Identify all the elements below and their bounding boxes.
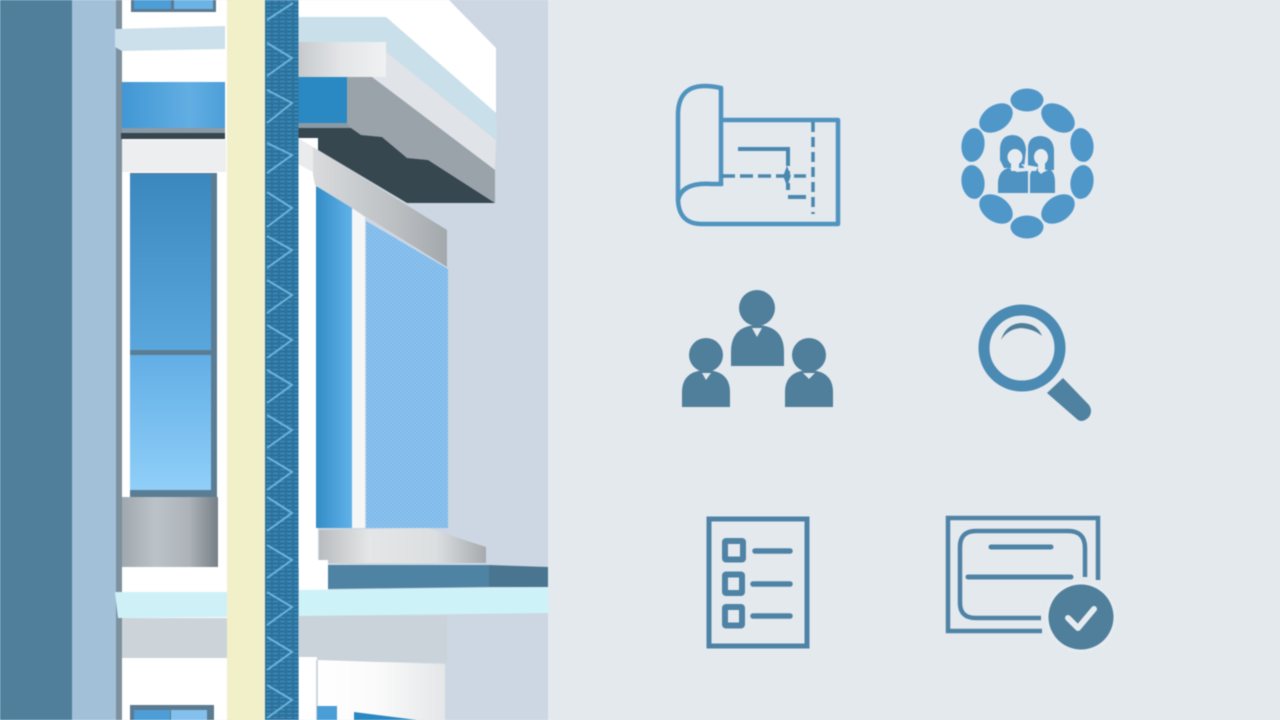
dark corner wall [0,0,72,720]
upper balcony [297,0,497,203]
right person [785,338,833,407]
sky behind building [296,0,548,720]
bay window [298,138,448,568]
ring of ovals [959,88,1096,238]
icon: checklist [709,519,807,646]
light corner wall [72,0,116,720]
center person [731,290,784,366]
blue balcony edge [299,560,548,590]
icon: team of three [682,290,833,407]
icon: magnifying glass [984,310,1091,421]
icon: certificate with check badge [948,518,1117,653]
gray spandrel panel [122,497,218,567]
lower right slabs [299,587,548,720]
icon: people in a ring [959,88,1096,238]
lower left slabs [115,592,228,720]
check badge [1045,581,1117,653]
icon: blueprint [678,86,838,224]
tall window [130,173,217,497]
left person [682,338,730,407]
two portraits [998,135,1055,193]
window ledge [319,528,486,563]
cream column [227,0,265,720]
left floor slabs [115,0,228,720]
textured blue column [265,0,298,720]
panel: building illustration [0,0,548,720]
